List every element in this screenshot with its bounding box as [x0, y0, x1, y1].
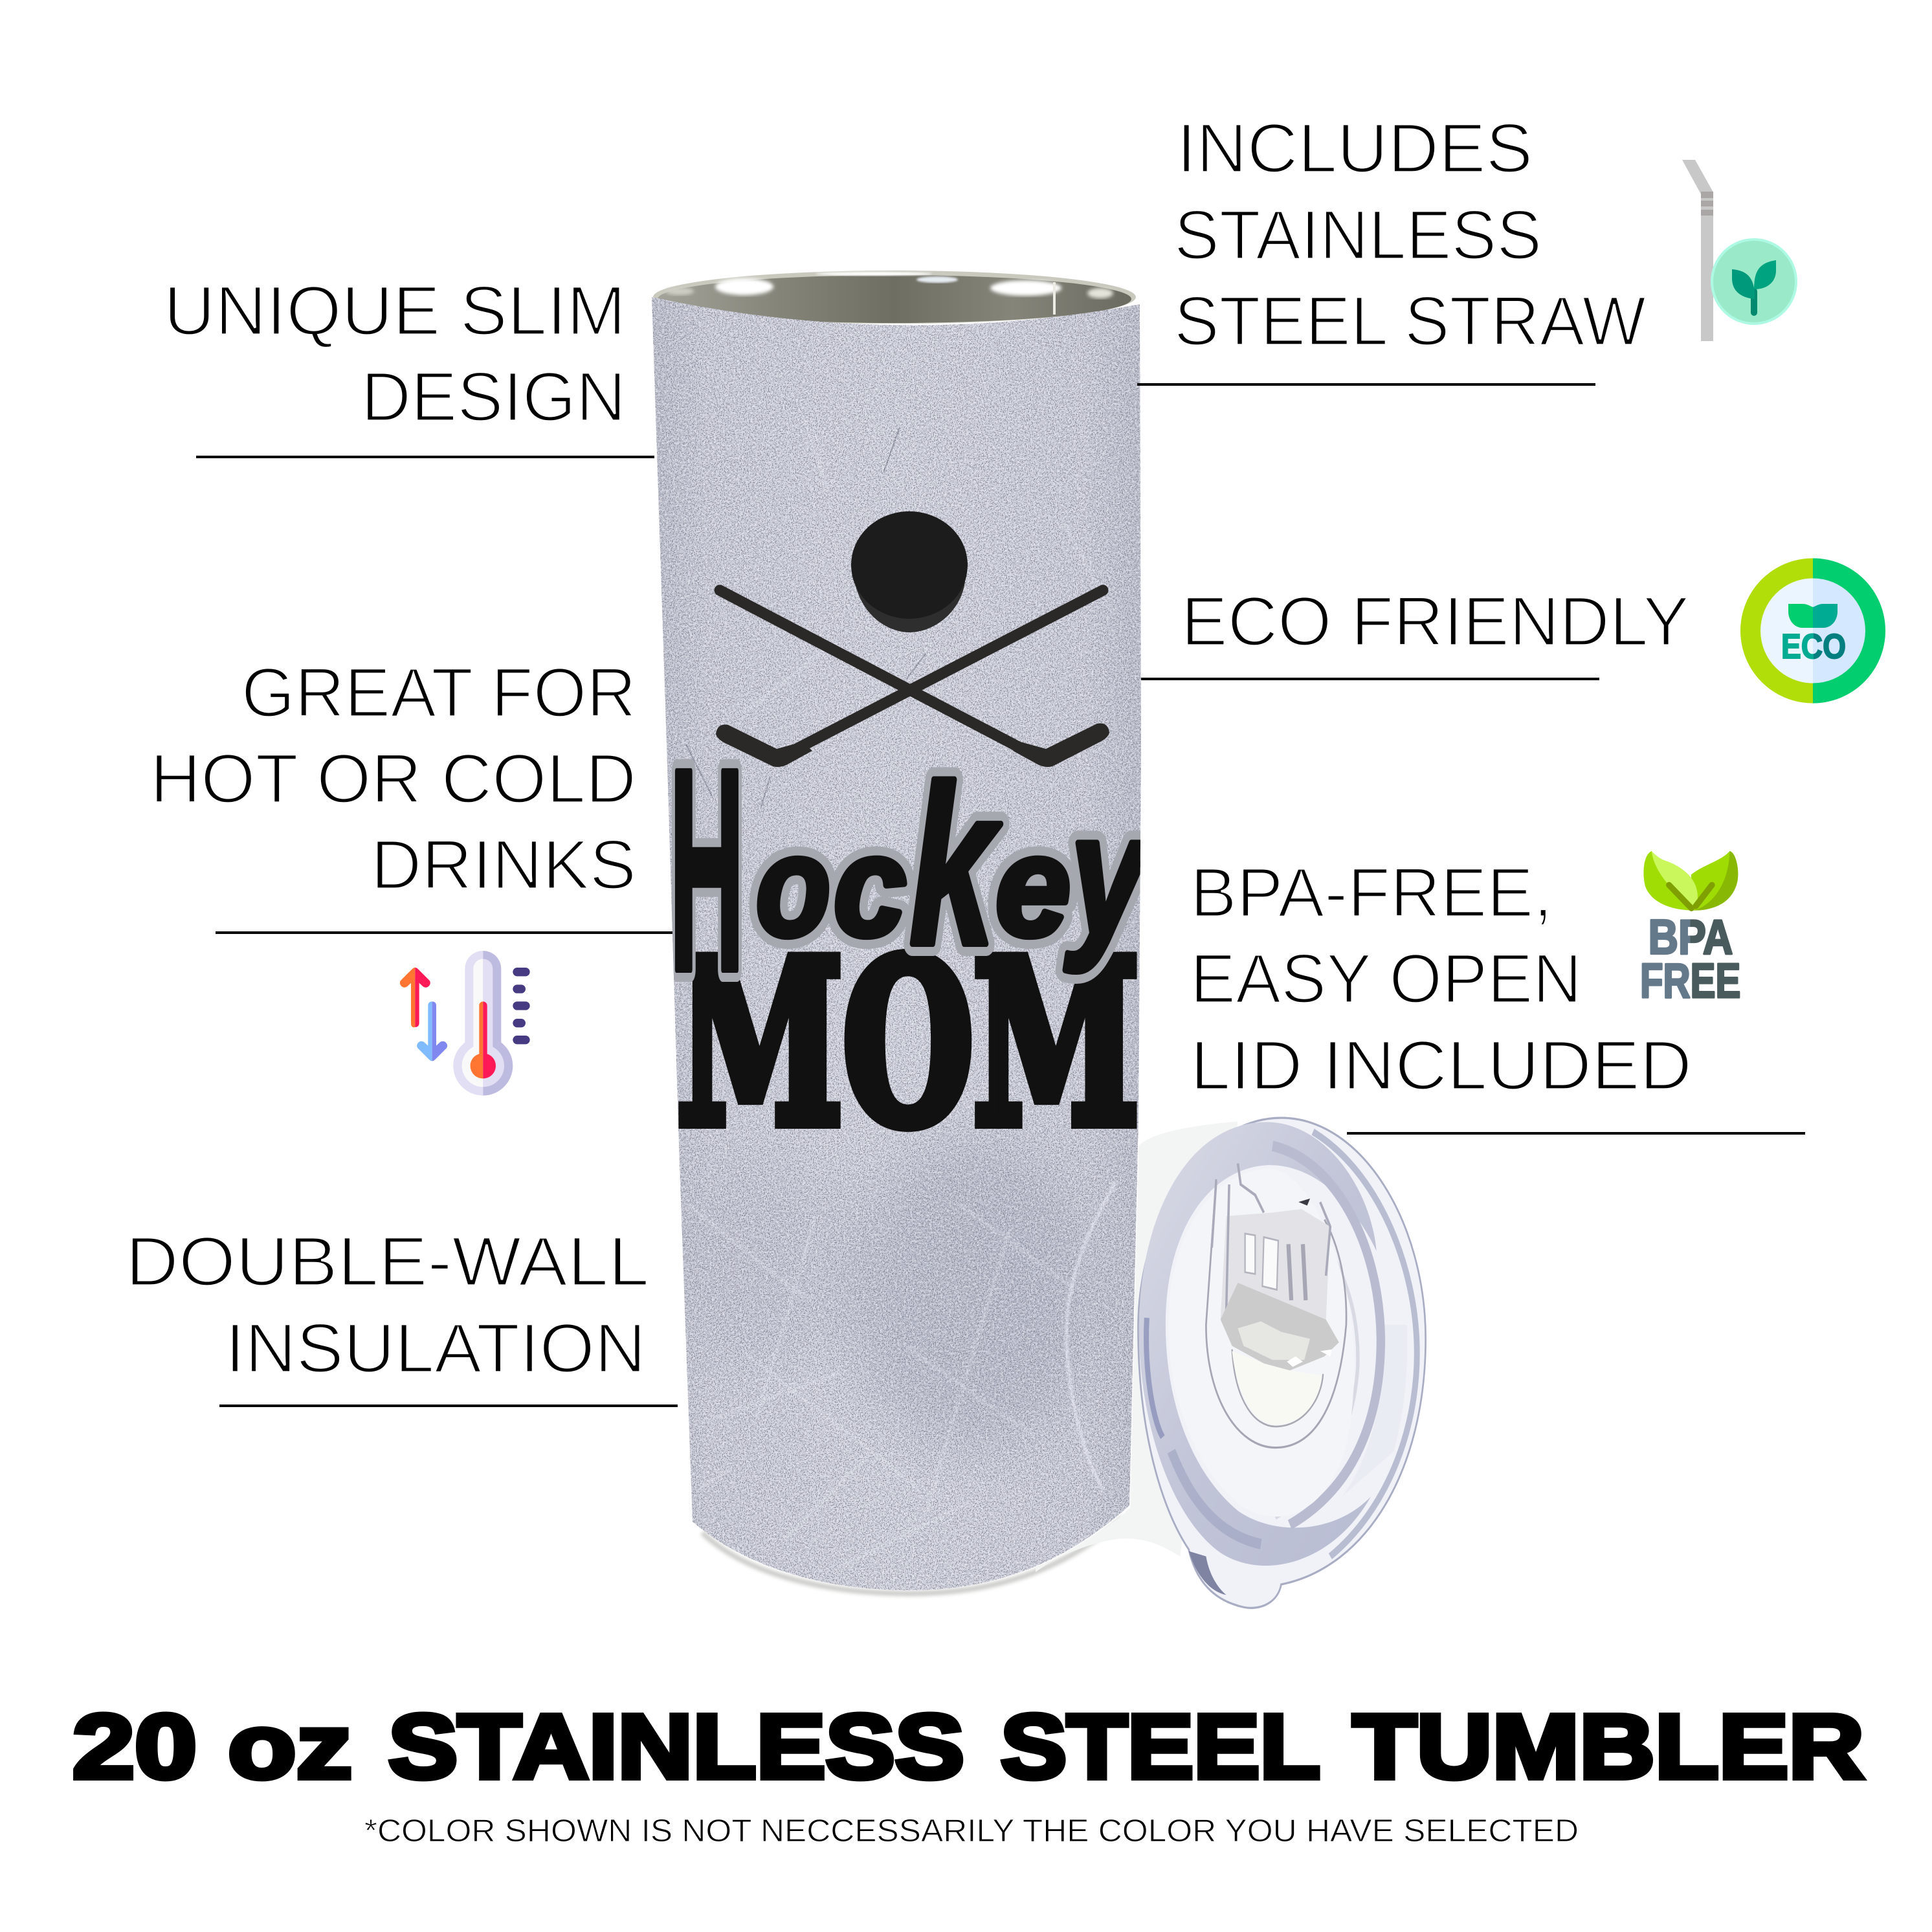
label text [164, 271, 626, 436]
lid right light panel [1342, 1325, 1407, 1496]
clear plastic lid [1036, 1118, 1426, 1608]
leader line [196, 456, 654, 458]
right leaf [1691, 851, 1738, 911]
free text: FREE [1640, 953, 1740, 1008]
title: STAINLESS [388, 1695, 964, 1797]
thermometer outer [453, 951, 483, 1096]
mercury right [483, 1001, 496, 1078]
leader line [1137, 383, 1595, 386]
Hockey outline layer [672, 759, 1140, 984]
label text: ECO FRIENDLY [1181, 582, 1689, 660]
lid seal zone [1168, 1169, 1354, 1516]
icon: steel straw [1682, 160, 1713, 341]
Hockey outline layer: o [756, 806, 830, 966]
sprout right leaf [1754, 260, 1776, 289]
Hockey black layer: o [756, 806, 830, 966]
lid inner second ring [1276, 1241, 1358, 1518]
title: 20 oz [72, 1695, 352, 1797]
label text: GREAT FOR [241, 653, 636, 731]
inner left half [1760, 579, 1813, 683]
label text: LID INCLUDED [1190, 1026, 1692, 1104]
lid inner ring [1272, 1146, 1381, 1525]
lid inner cream window [1232, 1351, 1322, 1425]
label text: STAINLESS [1174, 195, 1542, 274]
Hockey outline layer: H [669, 709, 744, 1031]
icon: bpa free leaves [1640, 851, 1740, 1008]
down arrow [417, 1001, 432, 1061]
callout: eco friendly [1141, 582, 1689, 680]
Hockey black layer: H [669, 709, 744, 1031]
left leaf [1643, 851, 1698, 911]
label text [1190, 853, 1692, 1104]
sprout stem [1751, 288, 1757, 316]
lid seal U channel [1206, 1179, 1346, 1448]
lid pull tab shadow [1189, 1551, 1227, 1595]
slider mechanism [1212, 1164, 1339, 1370]
blade left [716, 725, 812, 767]
Hockey outline layer: k [909, 739, 1003, 992]
icon: sprout badge [1711, 238, 1797, 325]
leaf left [1788, 604, 1813, 628]
Hockey black layer [674, 768, 1140, 975]
badge inner [1713, 241, 1795, 322]
up arrow [400, 968, 415, 1027]
leaf veins [1669, 885, 1712, 908]
callout: great for hot or cold drinks [150, 653, 672, 934]
down arrow right [432, 1001, 447, 1061]
Hockey black layer: y [1064, 778, 1153, 973]
sprout left leaf [1732, 269, 1755, 299]
label text: STEEL STRAW [1174, 282, 1646, 360]
right leaf shade [1694, 851, 1738, 911]
lid left highlight [1146, 1318, 1162, 1437]
tumbler [647, 271, 1153, 1618]
ghost of lid seen through tumbler [1067, 1182, 1116, 1491]
straw body [1682, 160, 1713, 341]
callout: unique slim design [164, 271, 654, 458]
stick shafts [720, 590, 1103, 751]
lid outer shell [1138, 1118, 1426, 1608]
hockey puck [851, 511, 968, 632]
label text: BPA-FREE, [1190, 853, 1553, 931]
leader line [1141, 678, 1599, 680]
title: STEEL [1001, 1695, 1320, 1797]
outer right half [1813, 558, 1885, 703]
label text [126, 1222, 649, 1387]
lid opening soft shade [1171, 1451, 1261, 1544]
lid halo [1036, 1122, 1238, 1572]
left leaf highlight [1652, 851, 1698, 907]
temperature ticks [513, 968, 530, 1044]
title: TUMBLER [1353, 1695, 1864, 1797]
label text: INCLUDES [1177, 109, 1533, 187]
title [72, 1695, 1864, 1797]
label text: INSULATION [225, 1309, 646, 1387]
thermometer outer right [483, 951, 513, 1096]
tumbler base shadow [702, 1518, 1123, 1593]
callout: bpa-free easy open lid [1190, 853, 1805, 1135]
label text [1174, 109, 1646, 360]
tumbler body with ice texture [647, 285, 1146, 1618]
label text: DOUBLE-WALL [126, 1222, 649, 1300]
outer left half [1740, 558, 1813, 703]
label text: UNIQUE SLIM [164, 271, 626, 350]
label text: EASY OPEN [1190, 939, 1582, 1017]
MOM block lettering: MOM [677, 913, 1139, 1175]
label text: HOT OR COLD [150, 739, 636, 817]
straw joint stripes [1701, 192, 1713, 216]
hockey sticks [716, 590, 1109, 767]
lid ring band [1139, 1122, 1377, 1566]
icon: eco badge [1740, 558, 1885, 703]
up arrow right [415, 968, 430, 1027]
icon: thermometer with hot and cold arrows [400, 951, 530, 1096]
disclaimer: *COLOR SHOWN IS NOT NECCESSARILY THE COLOR YOU HAVE SELECTED [364, 1814, 1579, 1849]
inner right half [1813, 579, 1865, 683]
thermometer inner right [483, 959, 504, 1087]
label text [150, 653, 636, 904]
lid right rim [1313, 1132, 1417, 1557]
label text: DESIGN [361, 357, 626, 436]
mercury left [471, 1001, 483, 1078]
Hockey outline layer: e [995, 806, 1071, 966]
tumbler inner rim [653, 271, 1136, 324]
Hockey outline layer: c [834, 806, 906, 966]
Hockey black layer: k [909, 739, 1003, 992]
Hockey black layer: e [995, 806, 1071, 966]
label text: DRINKS [371, 825, 636, 904]
lid seal inner curve [1232, 1349, 1323, 1427]
Hockey black layer: c [834, 806, 906, 966]
thermometer inner left [462, 959, 483, 1087]
leader line [1347, 1132, 1805, 1135]
leader line [219, 1405, 678, 1407]
leader line [216, 931, 672, 934]
Hockey script lettering [672, 759, 1140, 984]
eco text: ECO [1781, 627, 1846, 666]
callout: double-wall insulation [126, 1222, 678, 1407]
callout: includes stainless steel straw [1137, 109, 1646, 386]
leaf right [1813, 604, 1838, 628]
badge circle [1711, 238, 1797, 325]
bpa text: BPA [1649, 909, 1733, 964]
blade right [1013, 724, 1109, 767]
Hockey outline layer: y [1064, 778, 1153, 973]
